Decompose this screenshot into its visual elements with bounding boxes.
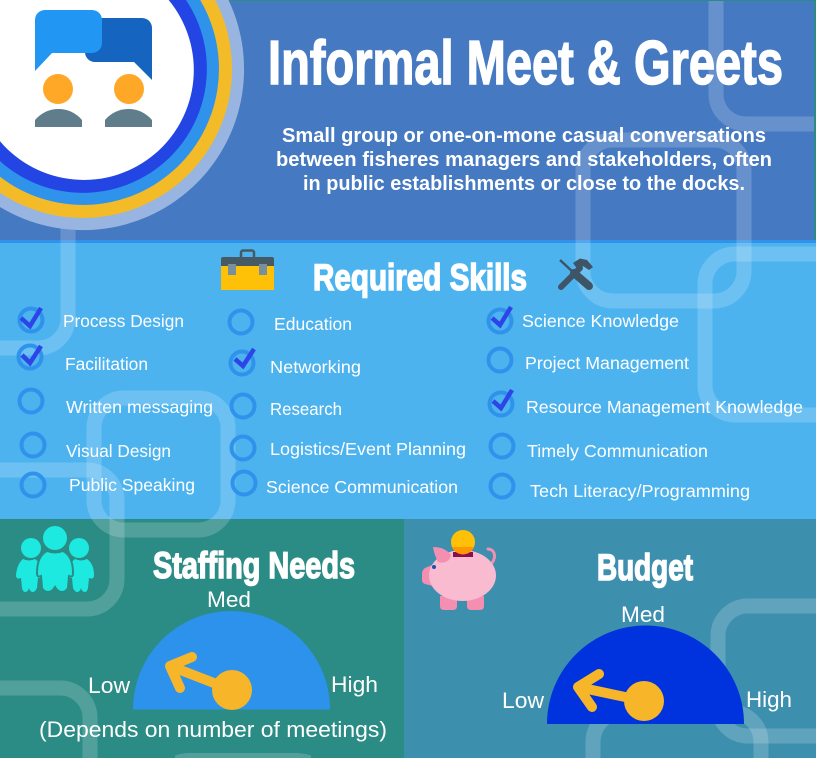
skill: Science Communication: Science Communication (266, 477, 458, 497)
gauge label: High: High (331, 672, 378, 697)
gauge label: Low: Low (88, 673, 130, 698)
skill: Education (230, 310, 352, 334)
skill: Timely Communication (490, 434, 708, 461)
skill: Research (232, 394, 342, 419)
icon: piggy bank with coin (422, 530, 496, 610)
gauge label: Med: Med (621, 602, 665, 627)
skill: Science Knowledge, checked: Science Knowledge (522, 311, 679, 331)
heading: required skills: Required Skills (313, 257, 527, 298)
skill: Public Speaking (22, 474, 195, 496)
description text: between fisheres managers and stakeholders, often (276, 149, 772, 171)
skill: Project Management: Project Management (525, 353, 689, 373)
icon: two people talking with speech bubbles (35, 10, 152, 127)
note: depends on number of meetings: (Depends on number of meetings) (39, 717, 387, 742)
panel: required skills (0, 240, 816, 519)
skill: Written messaging: Written messaging (66, 397, 213, 417)
panel: budget (404, 519, 816, 758)
skill: Tech Literacy/Programming: Tech Literacy/Programming (530, 481, 750, 501)
skill: Public Speaking: Public Speaking (69, 475, 195, 495)
skill: Resource Management Knowledge, checked: Resource Management Knowledge (526, 397, 803, 417)
heading: budget: Budget (597, 547, 693, 588)
panel: header (0, 0, 816, 240)
gauge label: Low: Low (502, 688, 544, 713)
gauge: staffing level low (133, 611, 330, 710)
gauge label: High: High (746, 687, 792, 712)
skill: Project Management (488, 348, 689, 373)
skill: Education: Education (274, 314, 352, 334)
gauge label: Med: Med (207, 587, 251, 612)
skill: Timely Communication: Timely Communication (527, 441, 708, 461)
skill: Process Design, checked (20, 308, 184, 332)
skill: Networking, checked (230, 349, 361, 377)
icon: hammer and screwdriver (560, 258, 593, 287)
skill: Research: Research (270, 399, 342, 419)
gauge: budget level low (547, 626, 744, 724)
icon: group of people (16, 526, 94, 592)
skill: Written messaging (20, 390, 213, 417)
skill: Process Design, checked: Process Design (63, 311, 184, 331)
skill: Resource Management Knowledge, checked (490, 390, 803, 417)
concentric badge rings (0, 0, 244, 230)
skill: Networking, checked: Networking (270, 357, 361, 377)
skill: Tech Literacy/Programming (490, 474, 750, 501)
description text: in public establishments or close to the docks. (303, 173, 745, 195)
skill: Visual Design: Visual Design (66, 441, 171, 461)
skill: Logistics/Event Planning: Logistics/Event Planning (270, 439, 466, 459)
description text: Small group or one-on-mone casual conversations (282, 125, 766, 147)
skill: Visual Design (22, 434, 171, 461)
panel: staffing needs (0, 519, 404, 758)
skill: Science Communication (232, 472, 458, 497)
skill: Facilitation, checked (18, 346, 148, 374)
skill: Science Knowledge, checked (488, 307, 679, 332)
description text (276, 125, 772, 195)
icon: toolbox (221, 250, 274, 290)
skill: Facilitation, checked: Facilitation (65, 354, 148, 374)
